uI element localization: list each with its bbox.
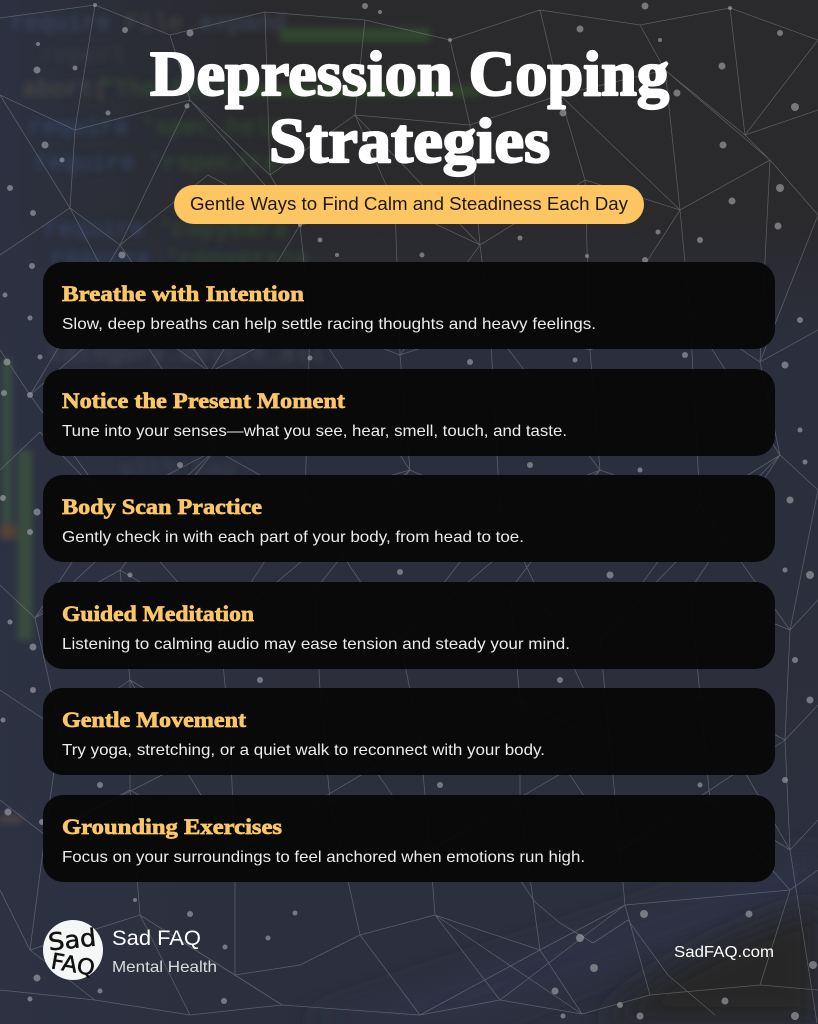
icon: sad faq logo [43,920,103,982]
background: dark code screen: require [50,247,151,274]
brand name: Mental Health [112,959,217,976]
background: dark code screen: .expand [185,11,286,38]
title: Depression Coping [150,39,669,109]
panel: breathe with intention [43,262,775,349]
background: dark code screen: require [28,115,129,142]
background: dark code screen: abort( [22,77,108,104]
website link: SadFAQ.com [674,944,774,961]
background: dark code screen: require [10,11,111,38]
panel: notice the present moment: Tune into your senses—what you see, hear, smell, touch, and taste. [62,423,567,440]
panel: body scan practice [43,475,775,562]
panel: grounding exercises: Grounding Exercises [62,814,282,839]
background: dark code screen: 'copybara [158,217,288,244]
brand name: Sad FAQ [112,927,201,950]
background: dark code screen: Category.delete_all [50,341,324,368]
title [150,39,669,176]
panel: notice the present moment [43,369,775,456]
background: dark code screen: 'conversio [165,247,309,274]
background: dark code screen: report [40,43,126,70]
panel: breathe with intention: Slow, deep breaths can help settle racing thoughts and heavy feelings. [62,316,596,333]
brand name [112,927,217,976]
subtitle pill [174,185,644,224]
background: dark code screen: File [125,11,183,38]
background: dark code screen: require [44,217,145,244]
background: dark code screen: require [34,151,135,178]
panel: guided meditation: Listening to calming audio may ease tension and steady your mind. [62,636,570,653]
panel: breathe with intention: Breathe with Intention [62,281,304,306]
background: dark code screen: 'rspec/ra [148,151,278,178]
panel: guided meditation [43,582,775,669]
panel: guided meditation: Guided Meditation [62,601,254,626]
panel: body scan practice: Gently check in with each part of your body, from head to toe. [62,529,524,546]
panel: gentle movement: Gentle Movement [62,707,247,732]
subtitle pill: Gentle Ways to Find Calm and Steadiness Each Day [190,194,628,214]
icon: sad faq logo: Sad [47,924,97,956]
background: dark code screen: 'spec_help [140,115,284,142]
panel: grounding exercises: Focus on your surroundings to feel anchored when emotions run high. [62,849,585,866]
background: dark code screen: with_tag [120,457,235,484]
panel: notice the present moment: Notice the Present Moment [62,388,346,413]
panel: body scan practice: Body Scan Practice [62,494,262,519]
icon: sad faq logo: FAQ [49,949,97,982]
background: dark code screen: "The Rails [100,77,244,104]
title: Strategies [269,106,550,176]
panel: grounding exercises [43,795,775,882]
panel: gentle movement: Try yoga, stretching, or a quiet walk to reconnect with your body. [62,742,545,759]
panel: gentle movement [43,688,775,775]
